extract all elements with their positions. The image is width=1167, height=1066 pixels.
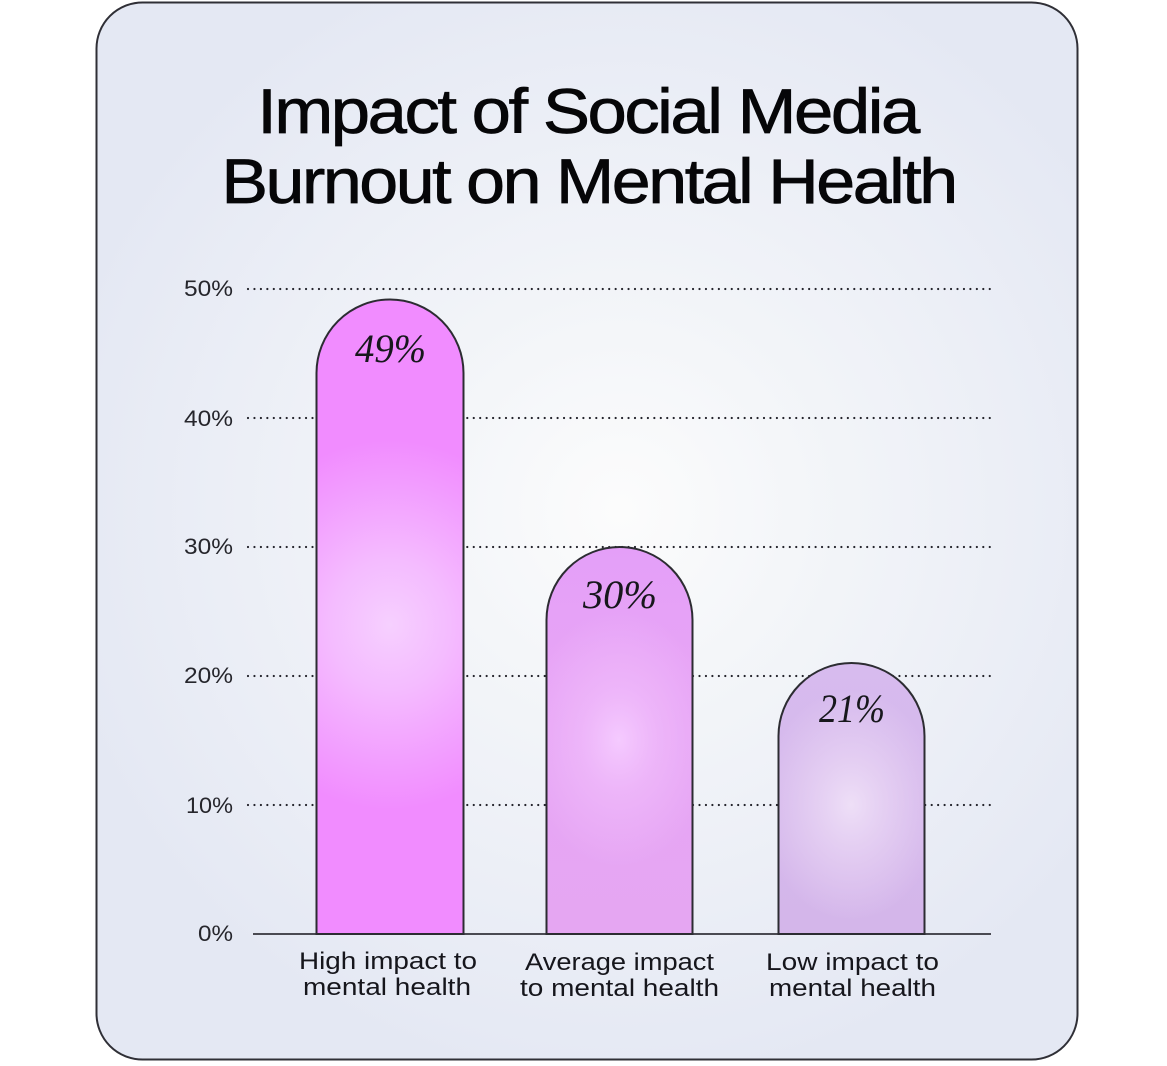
y axis labels bbox=[184, 276, 233, 946]
bar: low impact 21%: 21% bbox=[819, 686, 885, 731]
x axis labels: High impact to bbox=[299, 948, 477, 975]
x axis labels bbox=[299, 948, 939, 1002]
y axis labels: 0% bbox=[198, 921, 233, 946]
bar: high impact 49%: 49% bbox=[355, 326, 426, 371]
x axis bbox=[253, 933, 991, 935]
title bbox=[221, 77, 956, 217]
bar: average impact 30% bbox=[546, 547, 692, 934]
title: Burnout on Mental Health bbox=[221, 147, 956, 217]
title: Impact of Social Media bbox=[257, 77, 921, 147]
x axis labels: to mental health bbox=[520, 975, 719, 1002]
x axis labels: mental health bbox=[303, 974, 471, 1001]
y axis labels: 10% bbox=[186, 793, 233, 818]
grid lines bbox=[248, 289, 991, 805]
x axis labels: Low impact to bbox=[766, 949, 939, 976]
y axis labels: 20% bbox=[184, 663, 233, 688]
x axis labels: mental health bbox=[769, 975, 936, 1002]
bar: low impact 21% bbox=[778, 663, 924, 934]
y axis labels: 30% bbox=[184, 534, 233, 559]
bar: average impact 30%: 30% bbox=[582, 572, 657, 617]
y axis labels: 50% bbox=[184, 276, 233, 301]
bar: high impact 49% bbox=[316, 300, 464, 934]
x axis labels: Average impact bbox=[525, 949, 714, 976]
y axis labels: 40% bbox=[184, 406, 233, 431]
